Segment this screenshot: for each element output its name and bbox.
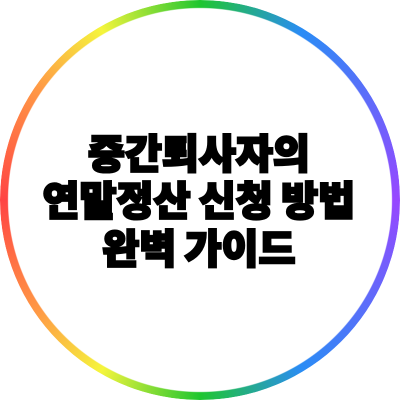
title: 연말정산 신청 방법 [43, 180, 355, 224]
title: 완벽 가이드 [102, 228, 296, 272]
title: 중간퇴사자의 [88, 132, 310, 176]
title [43, 132, 355, 272]
